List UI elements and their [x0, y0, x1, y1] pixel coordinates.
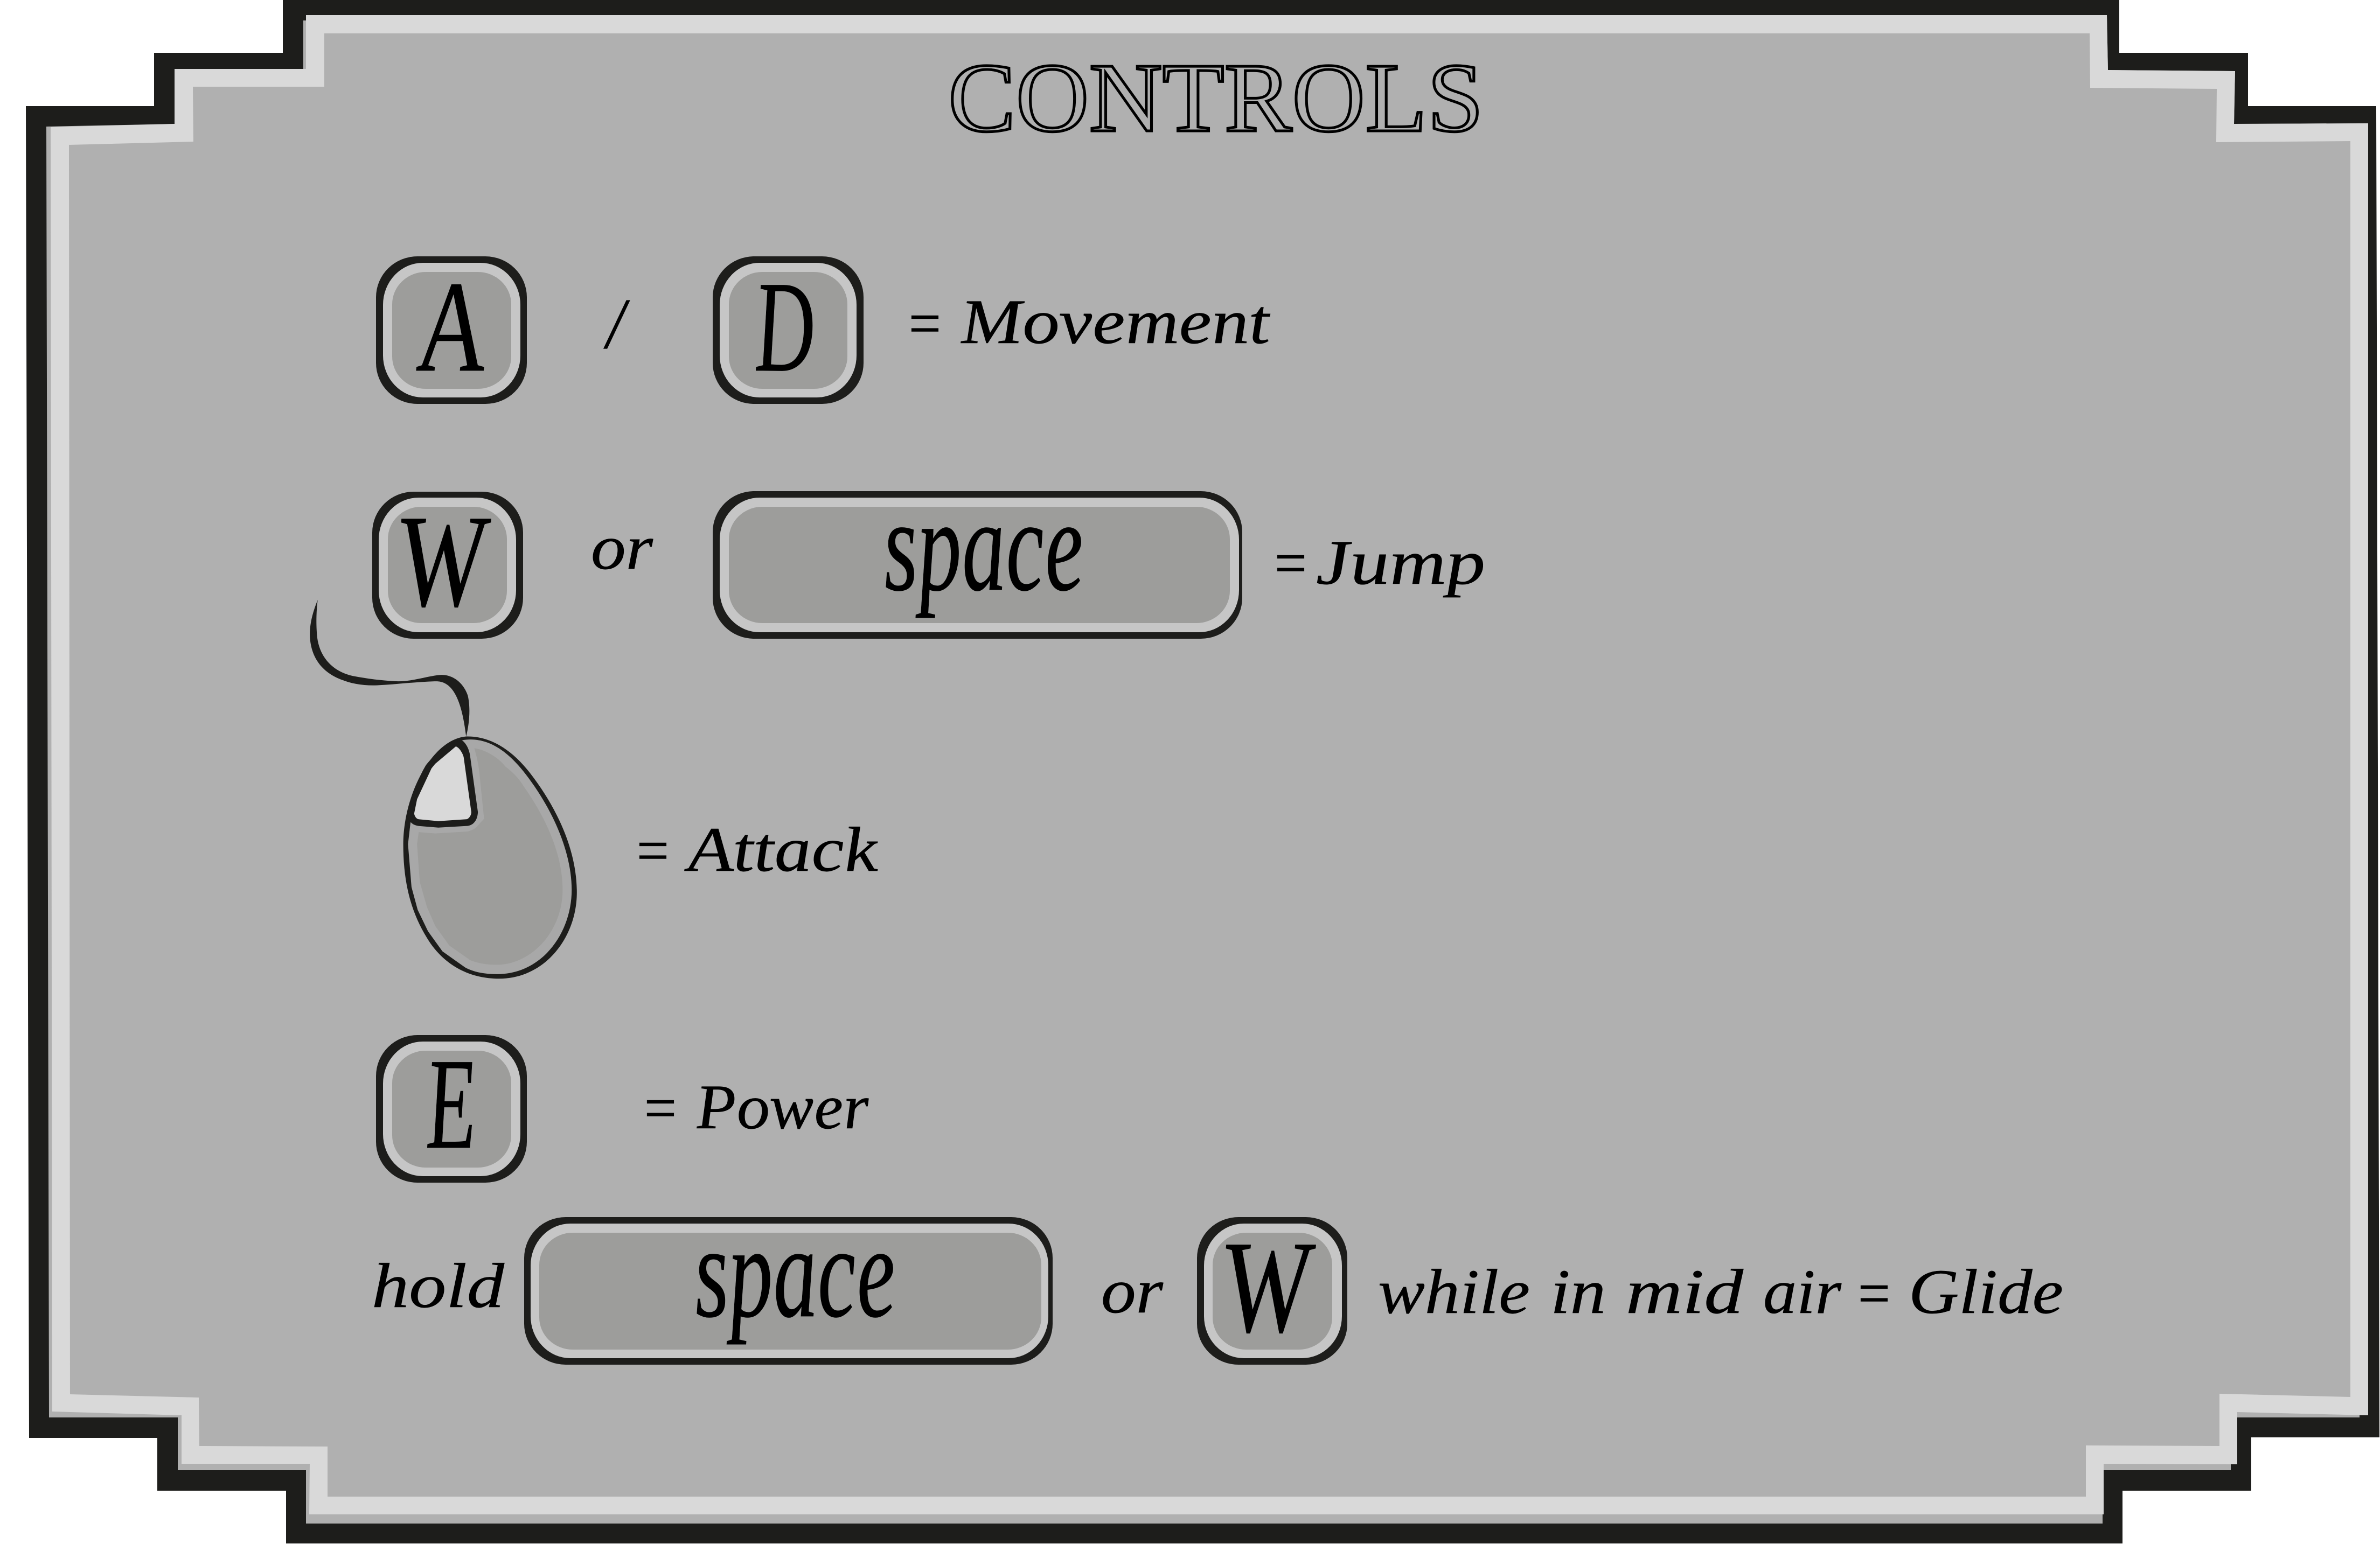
key: W: W — [393, 488, 497, 634]
mouse body — [403, 737, 577, 979]
label: glide: = — [1854, 1258, 1893, 1329]
label: glide: mid — [1626, 1256, 1744, 1327]
title: CONTROLS — [948, 43, 1484, 152]
key: space — [713, 473, 1242, 639]
separator slash: / — [603, 284, 630, 364]
label: power: Power — [693, 1072, 871, 1142]
key: D — [713, 255, 864, 404]
label: glide: air — [1763, 1256, 1842, 1327]
label: glide — [1378, 1256, 2063, 1329]
key: D: D — [750, 255, 818, 399]
label: movement: = — [905, 288, 944, 359]
label: jump — [1271, 527, 1487, 598]
label: attack — [633, 814, 880, 886]
mouse left button — [407, 740, 478, 828]
label: glide: Glide — [1909, 1256, 2063, 1327]
text: or (glide): or — [1101, 1256, 1164, 1326]
label: power: = — [641, 1073, 679, 1143]
mouse cord — [310, 600, 469, 737]
key: E: E — [421, 1032, 479, 1176]
label: attack: = — [633, 815, 672, 886]
label: jump: Jump — [1313, 527, 1487, 598]
text: hold: hold — [372, 1250, 505, 1321]
key: W (glide): W — [1217, 1214, 1322, 1360]
label: glide: in — [1550, 1256, 1606, 1327]
label: glide: while — [1378, 1256, 1530, 1327]
key: space: space — [879, 473, 1087, 619]
key: E — [376, 1032, 527, 1183]
label: jump: = — [1271, 528, 1310, 598]
key: space (glide): space — [690, 1199, 899, 1345]
label: attack: Attack — [681, 814, 880, 885]
key: space (glide) — [524, 1199, 1053, 1365]
key: A: A — [410, 255, 486, 399]
icon: mouse — [310, 600, 577, 979]
text: or: or — [591, 512, 653, 583]
label: movement: Movement — [957, 287, 1273, 357]
key: A — [376, 255, 527, 404]
